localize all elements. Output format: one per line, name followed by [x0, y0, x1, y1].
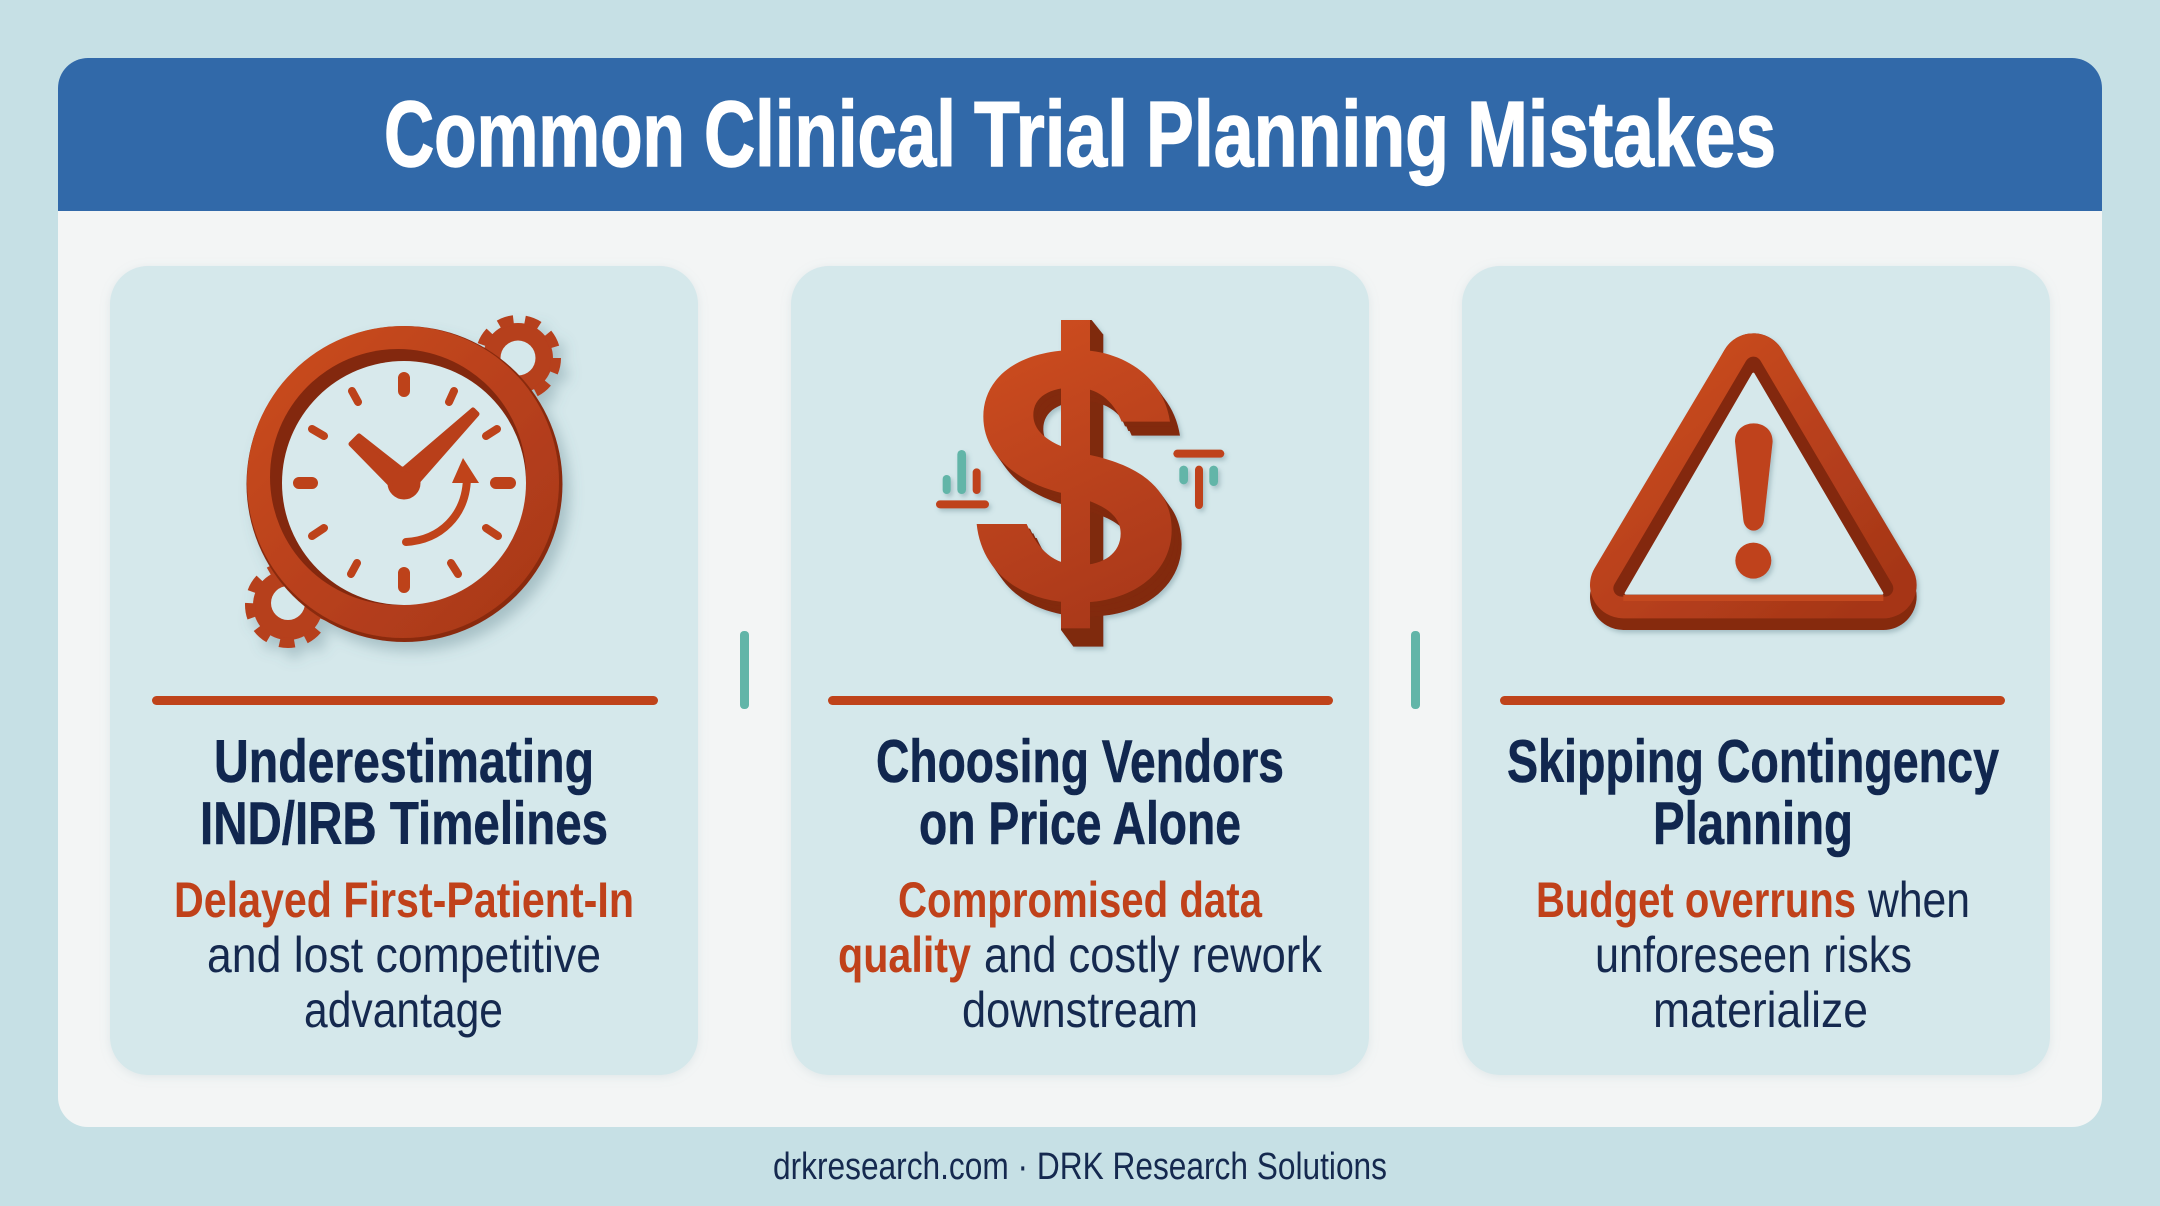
heading	[200, 728, 608, 857]
description	[838, 872, 1323, 1038]
heading	[1507, 728, 1999, 857]
heading: Skipping Contingency	[1507, 728, 1999, 795]
clock hands	[351, 410, 477, 497]
description	[1536, 872, 1970, 1038]
description: Compromised data	[898, 872, 1263, 928]
footer: drkresearch.com · DRK Research Solutions	[773, 1146, 1387, 1188]
divider: left	[740, 631, 749, 709]
clock ticks	[299, 378, 510, 587]
rule	[1500, 696, 2005, 705]
icon: dollar sign	[977, 320, 1182, 647]
description: quality	[838, 927, 971, 983]
divider: right	[1411, 631, 1420, 709]
panel: IND/IRB timelines	[110, 266, 698, 1075]
title	[384, 82, 1776, 186]
panel: vendor price	[791, 266, 1369, 1075]
exclamation mark	[1735, 423, 1773, 579]
title: Planning	[1146, 82, 1449, 186]
title: Mistakes	[1467, 82, 1776, 186]
icon: small bar chart right	[1173, 450, 1224, 509]
description: when	[1867, 872, 1970, 928]
icon: warning triangle	[1622, 365, 1885, 601]
title: Common	[384, 82, 685, 186]
rule	[828, 696, 1333, 705]
description: and costly rework	[984, 927, 1323, 983]
description: Budget overruns	[1536, 872, 1856, 928]
clock arrow	[406, 478, 467, 542]
title: Clinical	[704, 82, 956, 186]
heading: Planning	[1653, 790, 1853, 857]
heading	[876, 728, 1284, 857]
panel: contingency	[1462, 266, 2050, 1075]
heading: IND/IRB Timelines	[200, 790, 608, 857]
heading: Underestimating	[214, 728, 594, 795]
icon: small bar chart left	[936, 450, 989, 508]
description: materialize	[1653, 982, 1868, 1038]
title: Trial	[974, 82, 1128, 186]
heading: on Price Alone	[919, 790, 1241, 857]
description: advantage	[304, 982, 503, 1038]
heading: Choosing Vendors	[876, 728, 1284, 795]
title banner	[58, 58, 2102, 211]
rule	[152, 696, 658, 705]
description: Delayed First-Patient-In	[174, 872, 634, 928]
description: unforeseen risks	[1595, 927, 1912, 983]
description: downstream	[962, 982, 1198, 1038]
description	[174, 872, 634, 1038]
icon: clock with gears	[246, 320, 562, 643]
description: and lost competitive	[207, 927, 601, 983]
